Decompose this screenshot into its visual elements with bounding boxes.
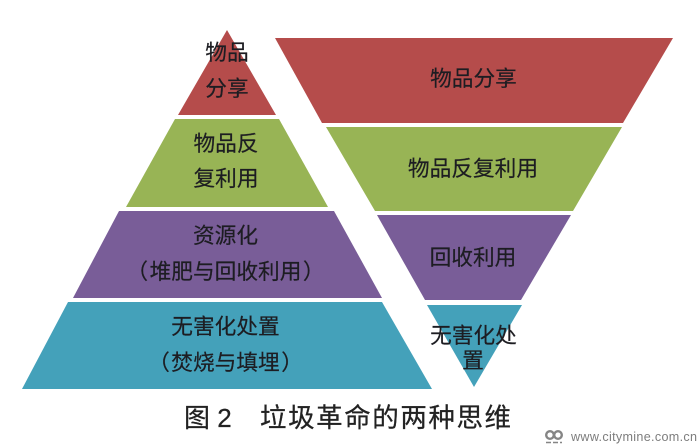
tier: harmless disposal (teal): 无害化处置 (171, 314, 280, 339)
tier: resource recovery (purple) (73, 211, 382, 298)
inverted pyramid: waste revolution thinking (275, 38, 673, 387)
icon: watermark logo (546, 431, 562, 442)
tier: reuse (green) (126, 119, 328, 207)
tier: resource recovery (purple): （堆肥与回收利用） (126, 259, 325, 284)
tier: reuse (green): 复利用 (193, 166, 259, 191)
tier: harmless disposal (teal): 置 (462, 348, 484, 373)
caption: 图 2 (184, 403, 232, 433)
tier: harmless disposal (teal): （焚烧与填埋） (148, 350, 303, 375)
tier: harmless disposal (teal): 无害化处 (430, 323, 517, 348)
tier: reuse (green): 物品反复利用 (408, 156, 538, 181)
tier: sharing (red) (275, 38, 673, 123)
pyramid: conventional waste thinking (22, 30, 432, 389)
tier: reuse (green): 物品反 (193, 131, 259, 156)
tier: harmless disposal (teal) (22, 302, 432, 389)
tier: recycling (purple): 回收利用 (430, 245, 516, 270)
caption: 垃圾革命的两种思维 (260, 403, 511, 433)
tier: reuse (green) (326, 127, 622, 211)
tier: recycling (purple) (377, 215, 571, 300)
watermark url: www.citymine.com.cn (570, 430, 697, 444)
tier: harmless disposal (teal) (427, 305, 522, 387)
tier: resource recovery (purple): 资源化 (193, 223, 258, 248)
tier: sharing (red) (178, 30, 276, 115)
tier: sharing (red): 物品分享 (430, 66, 517, 91)
tier: sharing (red): 物品 (205, 40, 249, 65)
tier: sharing (red): 分享 (205, 76, 249, 101)
